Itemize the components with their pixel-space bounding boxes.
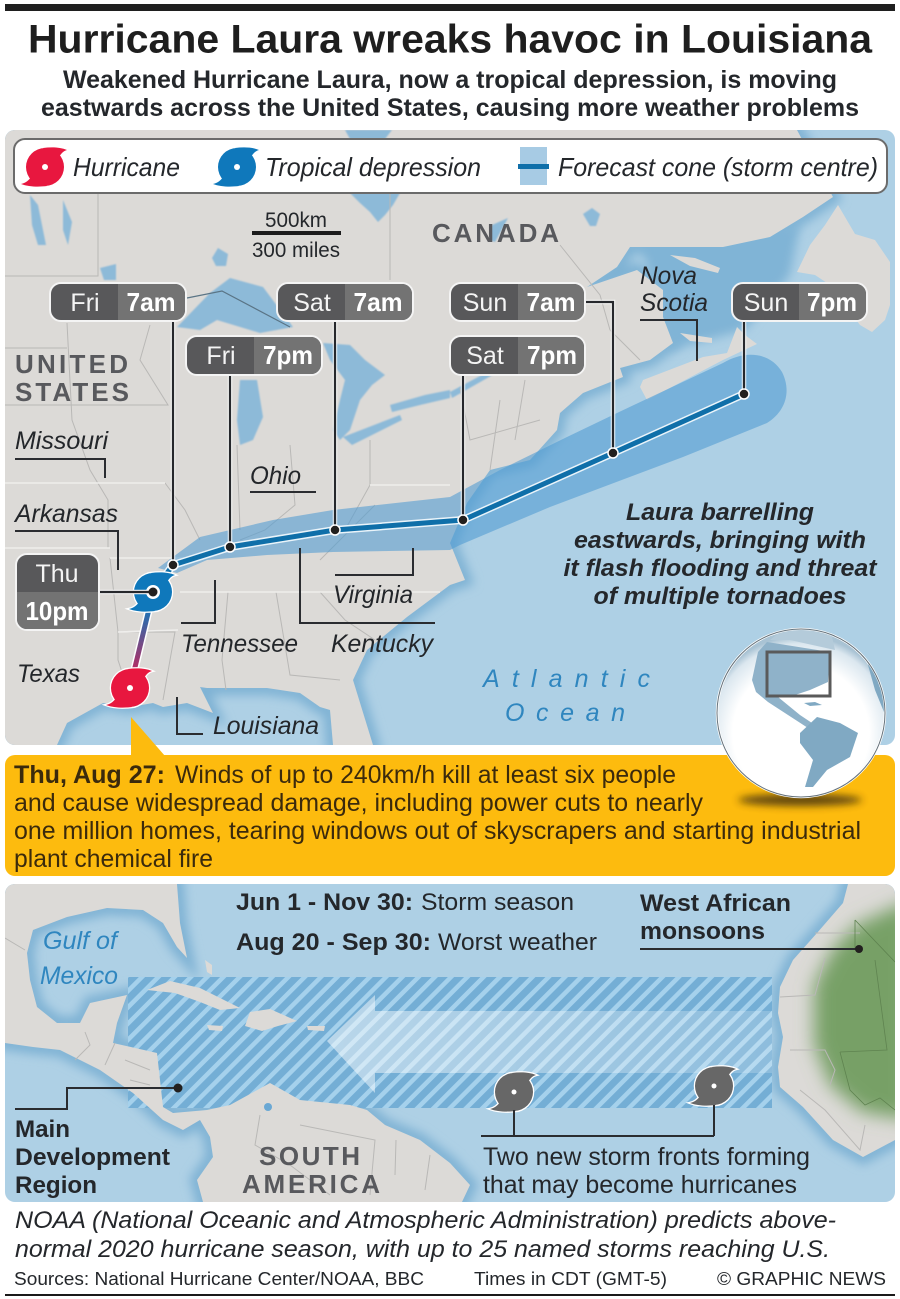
panel: Thu Aug 27 callout: plant chemical fire	[14, 846, 213, 873]
callout: Laura barrelling: of multiple tornadoes	[594, 583, 846, 610]
callout pointer	[131, 717, 165, 756]
label: Main Development Region: Development	[15, 1144, 170, 1171]
state label: Louisiana: Louisiana	[213, 712, 319, 740]
NOAA note	[15, 1207, 836, 1263]
time label: Sat 7pm: 7pm	[527, 340, 577, 370]
season dates: Aug 20 - Sep 30:	[236, 929, 431, 956]
label: West African monsoons: monsoons	[640, 918, 765, 945]
state label: Kentucky	[300, 548, 435, 658]
label: Nova Scotia: Nova	[640, 262, 697, 290]
title: Hurricane Laura wreaks havoc in Louisiana	[28, 18, 873, 62]
label: Atlantic Ocean	[481, 665, 650, 727]
panel: Thu Aug 27 callout: Thu, Aug 27:	[14, 762, 165, 789]
time label: Sat 7pm: Sat	[466, 342, 504, 370]
season dates: Worst weather	[438, 929, 597, 956]
top rule	[5, 4, 895, 11]
time label: Sat 7am	[277, 283, 413, 321]
icon: new storm front west	[490, 1072, 536, 1112]
season dates: Jun 1 - Nov 30:	[236, 889, 413, 916]
icon: hurricane legend	[21, 147, 67, 187]
state label: Arkansas: Arkansas	[13, 500, 118, 528]
label: Gulf of Mexico: Mexico	[40, 962, 118, 990]
state label: Kentucky: Kentucky	[331, 630, 434, 658]
time label: Sun 7pm: Sun	[744, 289, 788, 317]
globe locator	[717, 628, 895, 806]
time label: Thu 10pm	[16, 554, 158, 630]
time label: Fri 7pm	[186, 336, 322, 375]
bottom rule	[5, 1294, 895, 1296]
state and country borders	[5, 193, 640, 700]
label: United States: STATES	[15, 377, 129, 407]
panel: storm track map	[5, 130, 895, 745]
label: West African monsoons	[640, 890, 863, 953]
icon: forecast cone legend	[518, 147, 549, 185]
state label: Missouri	[15, 427, 109, 478]
state label: Louisiana	[177, 697, 319, 740]
development arrow	[327, 995, 772, 1093]
land: North America	[5, 130, 833, 745]
label: new storm fronts	[481, 1105, 810, 1199]
time label: Sat 7am: 7am	[354, 287, 402, 317]
callout: Laura barrelling	[564, 499, 877, 610]
label: Canada: CANADA	[432, 218, 559, 248]
storm track	[130, 394, 744, 688]
NOAA note: NOAA (National Oceanic and Atmospheric Administration) predicts above-	[15, 1207, 836, 1234]
state label: Virginia	[333, 548, 413, 609]
label: new storm fronts: Two new storm fronts forming	[483, 1143, 810, 1171]
season dates: Storm season	[421, 889, 574, 916]
panel: hurricane season map	[5, 884, 900, 1202]
label: South America: AMERICA	[242, 1169, 380, 1199]
main development region hatching	[128, 977, 772, 1108]
time label: Sun 7am: Sun	[463, 289, 507, 317]
label: Main Development Region: Region	[15, 1172, 97, 1199]
lake Maracaibo	[264, 1103, 272, 1111]
state label: Tennessee	[181, 580, 298, 658]
track position dots	[168, 389, 749, 570]
sources footer: Times in CDT (GMT-5)	[474, 1268, 667, 1289]
land: Atlantic Canada islands	[640, 205, 890, 400]
time label: Fri 7pm: 7pm	[263, 340, 313, 370]
time label: Sat 7pm	[450, 336, 585, 375]
state label: Ohio: Ohio	[250, 462, 301, 490]
callout: Laura barrelling: Laura barrelling	[626, 499, 814, 526]
label: Gulf of Mexico: Gulf of	[43, 927, 120, 955]
callout: Laura barrelling: it flash flooding and threat	[564, 555, 877, 582]
panel: Thu Aug 27 callout: one million homes, tearing windows out of skyscrapers and starting industrial	[14, 818, 861, 845]
state label: Virginia: Virginia	[333, 581, 413, 609]
time label: Thu 10pm: Thu	[35, 560, 79, 588]
region borders	[5, 933, 865, 1195]
NOAA note: normal 2020 hurricane season, with up to 25 named storms reaching U.S.	[15, 1236, 830, 1263]
label: United States	[15, 349, 129, 407]
callout: Laura barrelling: eastwards, bringing with	[574, 527, 866, 554]
time label: Sun 7am	[450, 283, 585, 321]
legend label: hurricane: Hurricane	[73, 152, 180, 182]
time label: Fri 7pm: Fri	[206, 342, 236, 370]
legend box	[14, 139, 887, 193]
scale bar: 300 miles	[252, 239, 340, 262]
time label: Sun 7pm	[732, 283, 867, 321]
label: new storm fronts: that may become hurricanes	[483, 1171, 797, 1199]
legend label: tropical depression: Tropical depression	[265, 152, 481, 182]
subtitle: eastwards across the United States, causing more weather problems	[41, 95, 859, 122]
land: Americas	[5, 884, 470, 1202]
forecast cone	[158, 355, 787, 573]
icon: tropical depression legend	[213, 147, 259, 187]
season dates	[236, 889, 597, 956]
label: South America: SOUTH	[259, 1141, 360, 1171]
label: Main Development Region: Main	[15, 1116, 70, 1143]
label: Atlantic Ocean: Ocean	[505, 699, 625, 727]
time label: Fri 7am	[50, 283, 186, 321]
subtitle	[41, 67, 859, 122]
label: Main Development Region	[15, 1084, 182, 1199]
state label: Arkansas	[13, 500, 118, 570]
icon: hurricane marker	[106, 668, 152, 708]
sources footer: © GRAPHIC NEWS	[717, 1268, 886, 1289]
state label: Tennessee: Tennessee	[181, 630, 298, 658]
time label: Fri 7am: Fri	[70, 289, 100, 317]
label: Atlantic Ocean: Atlantic	[481, 665, 650, 693]
time label: Sat 7am: Sat	[293, 289, 331, 317]
lakes	[30, 130, 600, 445]
forecast leader lines	[173, 302, 744, 565]
monsoon green area	[814, 900, 900, 1120]
label: Nova Scotia	[640, 262, 708, 361]
state label: Missouri: Missouri	[15, 427, 109, 455]
label: Nova Scotia: Scotia	[640, 289, 708, 317]
time label: Thu 10pm: 10pm	[26, 596, 88, 626]
panel: Thu Aug 27 callout	[5, 755, 895, 876]
state label: Texas: Texas	[17, 660, 80, 688]
time label: Fri 7am: 7am	[126, 287, 176, 317]
label: West African monsoons: West African	[640, 890, 791, 917]
icon: tropical depression marker	[129, 572, 175, 612]
sources footer	[14, 1268, 886, 1289]
icon: new storm front east	[690, 1066, 736, 1106]
time label: Sun 7pm: 7pm	[807, 287, 857, 317]
label: Gulf of Mexico	[40, 927, 120, 990]
scale bar	[252, 209, 341, 262]
label: South America	[242, 1141, 380, 1199]
scale bar: 500km	[265, 209, 327, 232]
panel: Thu Aug 27 callout: and cause widespread damage, including power cuts to nearly	[14, 790, 704, 817]
land: Caribbean islands	[147, 960, 325, 1031]
time label: Sun 7am: 7am	[526, 287, 576, 317]
panel: Thu Aug 27 callout: Winds of up to 240km/h kill at least six people	[175, 762, 676, 789]
sources footer: Sources: National Hurricane Center/NOAA, BBC	[14, 1268, 424, 1289]
label: United States: UNITED	[15, 349, 128, 379]
land: West Africa	[778, 884, 895, 1157]
subtitle: Weakened Hurricane Laura, now a tropical depression, is moving	[63, 67, 837, 94]
legend label: forecast cone: Forecast cone (storm centre)	[558, 152, 878, 182]
